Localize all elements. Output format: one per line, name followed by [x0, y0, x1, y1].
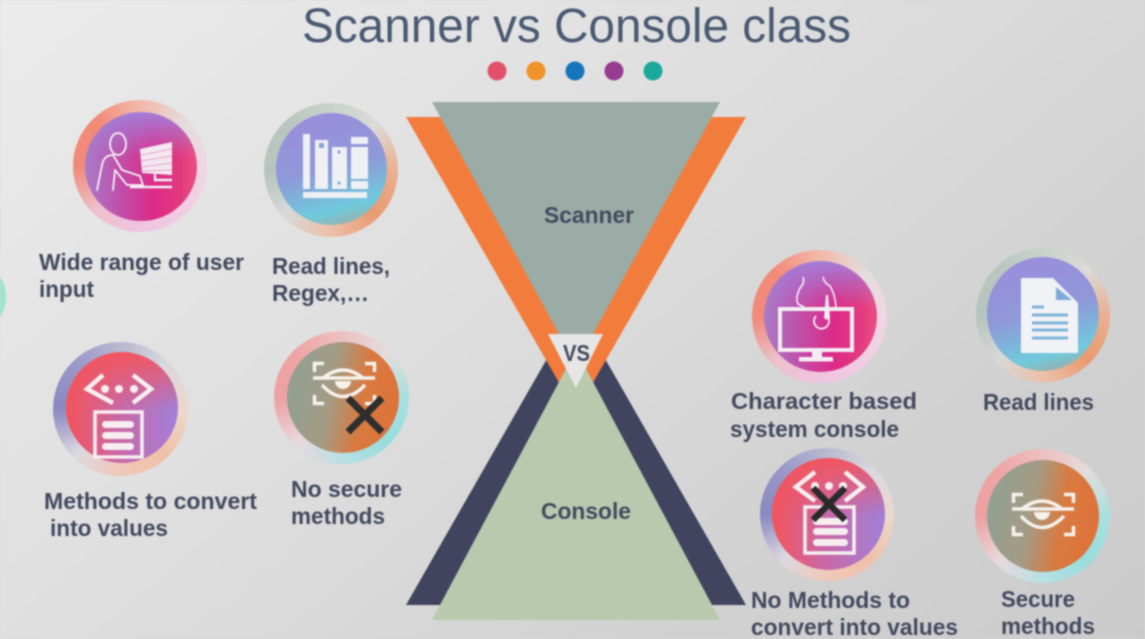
decorative colored dots — [488, 62, 662, 80]
icon: eye scan crossed out — [274, 331, 409, 464]
orange upper triangle — [406, 117, 746, 412]
label: secure methods — [1001, 586, 1095, 639]
label: no secure methods: methods — [291, 503, 385, 529]
label: read lines: Read lines — [983, 389, 1094, 415]
vs triangle — [548, 334, 603, 388]
label: character based system console — [730, 388, 917, 442]
icon: books on shelf — [264, 103, 398, 237]
label: no methods to convert into values: No Methods to — [751, 587, 910, 613]
label: read lines, regex: Regex,… — [272, 280, 369, 306]
label: character based system console: Character based — [731, 388, 917, 414]
label: no methods to convert into values — [751, 587, 958, 639]
icon: code to values crossed out — [760, 448, 894, 581]
hourglass diagram — [406, 102, 746, 620]
label: character based system console: system console — [730, 416, 899, 442]
icon: person at computer — [73, 100, 207, 232]
scanner triangle — [432, 102, 720, 365]
icon: code to values — [53, 342, 188, 476]
console label: Console — [541, 498, 631, 524]
label: wide range of user input: Wide range of user — [39, 249, 244, 275]
icon: eye scan — [975, 449, 1110, 583]
label: no secure methods: No secure — [291, 476, 402, 502]
icon: document — [976, 248, 1110, 382]
label: methods to convert into values: Methods to convert — [44, 488, 257, 514]
icon: hand touching monitor — [752, 250, 887, 383]
label: no secure methods — [291, 476, 402, 529]
label: methods to convert into values — [44, 488, 257, 541]
label: read lines, regex — [272, 253, 390, 306]
console triangle — [432, 350, 720, 620]
label: secure methods: methods — [1001, 613, 1095, 639]
vs label: VS — [563, 340, 590, 366]
label: wide range of user input: input — [39, 276, 94, 302]
label: methods to convert into values: into values — [50, 515, 168, 541]
label: wide range of user input — [39, 249, 244, 302]
left edge teal shape — [0, 273, 6, 321]
label: secure methods: Secure — [1001, 586, 1075, 612]
dark lower triangle — [406, 308, 746, 605]
title: Scanner vs Console class — [302, 0, 851, 53]
label: read lines, regex: Read lines, — [272, 253, 390, 279]
scanner label: Scanner — [544, 202, 634, 228]
